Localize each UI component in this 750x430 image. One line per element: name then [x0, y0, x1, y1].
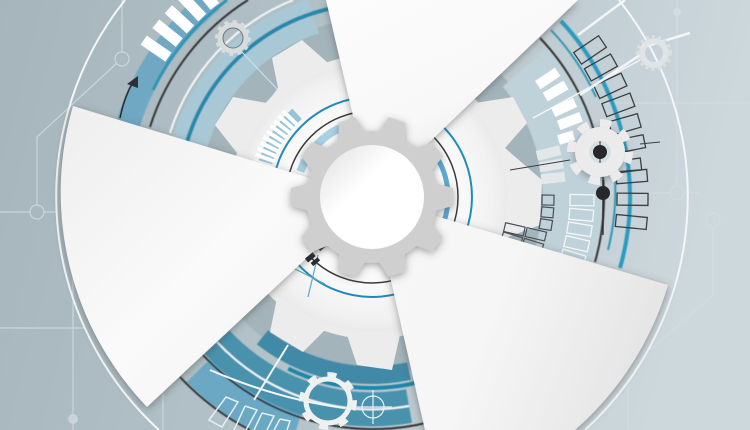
- small gear: top right pale: [638, 37, 670, 69]
- lower outlined rectangles: [209, 397, 290, 430]
- inner disc: [237, 62, 507, 332]
- tech bars on right: [535, 68, 583, 184]
- inner technical rings: [236, 61, 508, 333]
- central gear: [291, 116, 453, 278]
- paper wedge: top: [326, 0, 578, 197]
- dark grid lower gear edge: [501, 195, 554, 253]
- small dark connectors near hub: [305, 243, 327, 266]
- big pale gear: [215, 40, 542, 370]
- paper wedge: left: [61, 106, 372, 407]
- paper wedge: bottom right: [372, 197, 668, 430]
- outlined radial rectangles right: [574, 36, 648, 229]
- white outlined grid lower right: [560, 194, 594, 267]
- ring bands and arcs: [126, 0, 630, 430]
- crosshair circle bottom: [356, 390, 392, 424]
- small gear: bottom white hollow: [302, 375, 354, 427]
- white radial bars: [141, 0, 219, 62]
- white ticks upper left: [253, 109, 299, 169]
- arrow upper left: [120, 76, 138, 118]
- small gear: top left hollow: [217, 22, 249, 54]
- small gear: right with black hub: [510, 123, 660, 235]
- light diagonal lines: [210, 0, 690, 408]
- central hub: [320, 145, 424, 249]
